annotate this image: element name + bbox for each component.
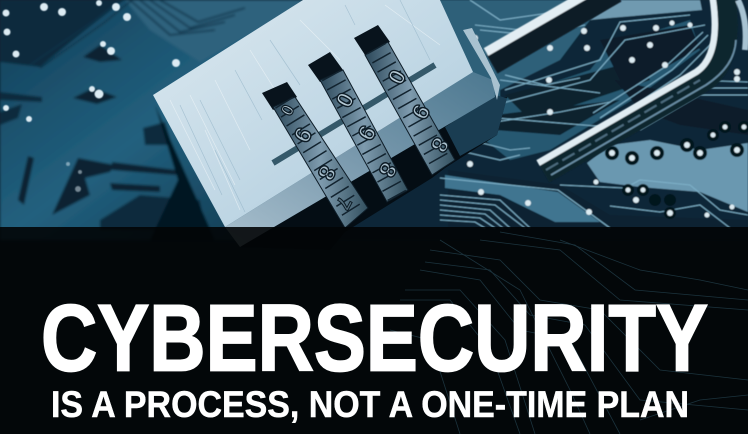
circuit pads	[467, 20, 746, 218]
wheel one: 0	[276, 101, 298, 119]
subtitle: IS A PROCESS, NOT A ONE-TIME PLAN	[51, 384, 689, 425]
wheel three: 8	[425, 133, 454, 157]
wheel one: 7	[331, 193, 355, 213]
panel: blue left circuit area	[0, 0, 320, 240]
wheel three: 9	[407, 100, 435, 124]
circuit pad halos	[605, 121, 748, 219]
wheel one: 9	[289, 123, 317, 147]
padlock collar	[463, 28, 500, 100]
dark lower overlay	[0, 227, 748, 434]
left circuit pads	[2, 0, 180, 192]
padlock shackle	[486, 0, 746, 175]
wheel two: 0	[331, 88, 359, 112]
icon: padlock	[153, 0, 746, 250]
wheel one	[273, 97, 368, 228]
padlock underside	[240, 97, 507, 250]
padlock top face	[153, 0, 473, 227]
slots	[262, 25, 390, 110]
wheel three: 0	[383, 65, 411, 89]
combination wheels	[273, 42, 455, 228]
wheel two	[320, 70, 408, 202]
wheel three	[365, 42, 455, 175]
wheel two: 9	[353, 121, 381, 145]
faint lower circuit traces	[390, 232, 748, 434]
wheel one: 8	[312, 161, 341, 185]
panel: right circuit traces	[320, 0, 748, 240]
padlock front band	[225, 72, 495, 247]
combination groove	[273, 65, 435, 163]
wheel two: 8	[373, 158, 402, 182]
